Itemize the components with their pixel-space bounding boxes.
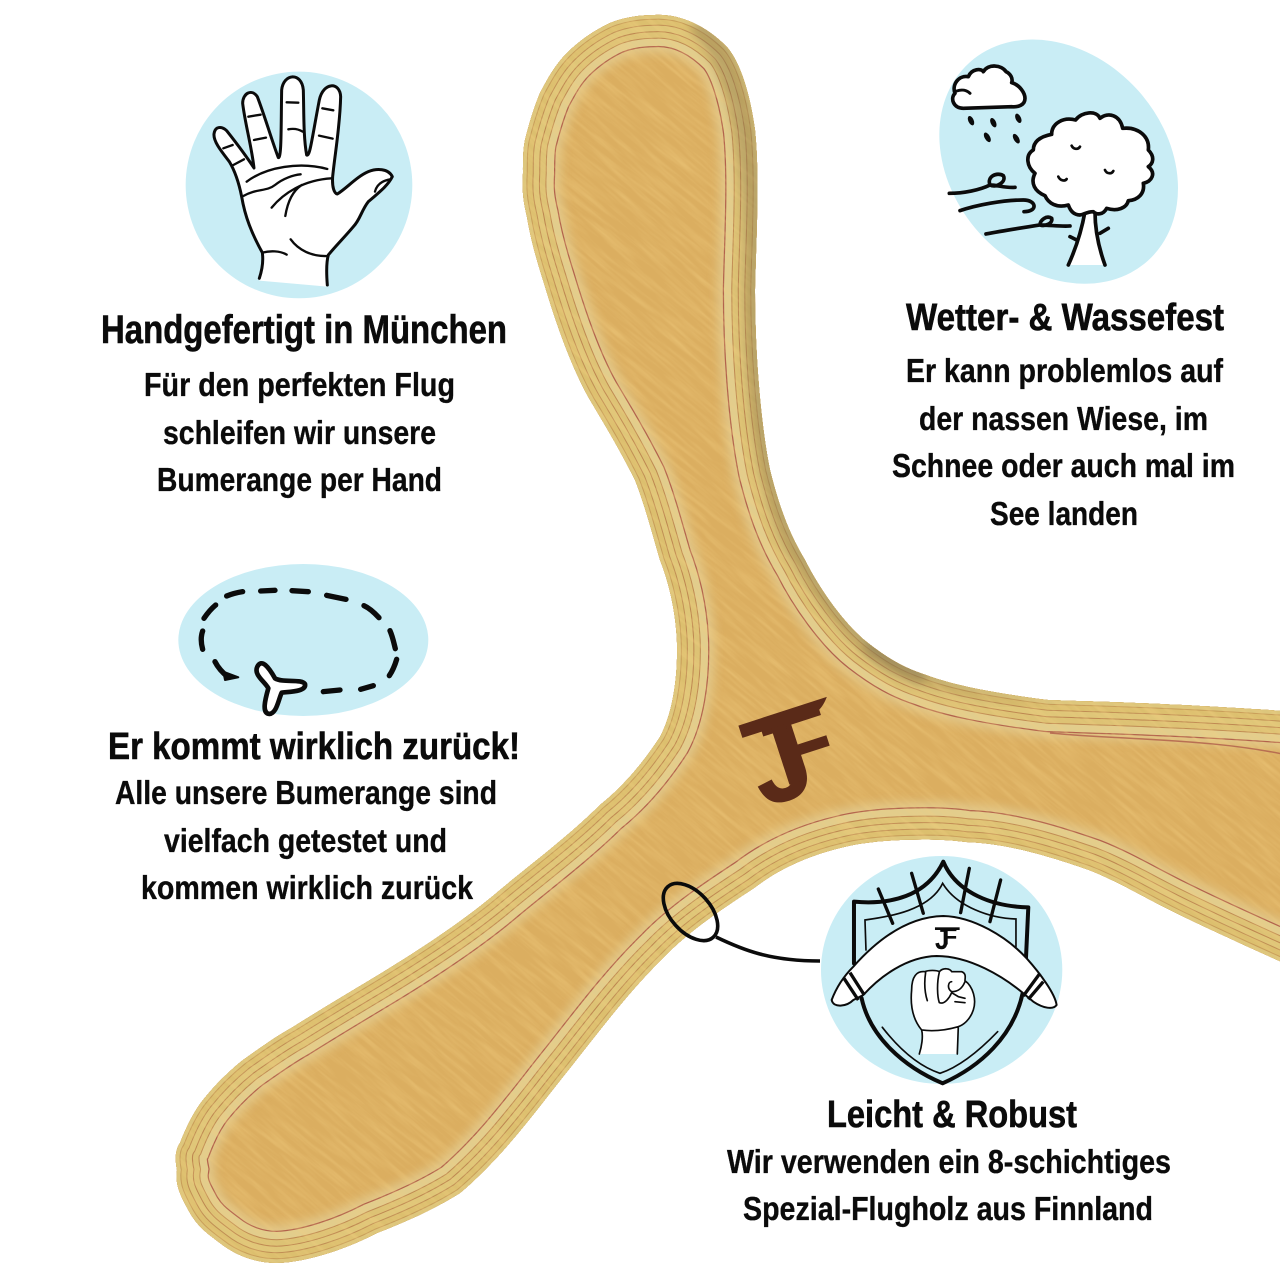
text block: returns: Alle unsere Bumerange sind (115, 774, 497, 811)
icon: small logo (935, 923, 960, 956)
text block: light and robust: Spezial-Flugholz aus Finnland (743, 1190, 1153, 1227)
text block: handmade: Für den perfekten Flug (144, 366, 455, 403)
text block: handmade: schleifen wir unsere (163, 414, 436, 451)
text block: returns (115, 774, 497, 906)
icon: hand (186, 72, 412, 298)
icon: small logo: J (935, 923, 949, 956)
text block: weatherproof: Schnee oder auch mal im (892, 447, 1235, 484)
text block: handmade: Bumerange per Hand (157, 461, 442, 498)
panel: handmade (101, 72, 507, 498)
icon: shield with boomerang and fist (821, 856, 1062, 1084)
text block: returns: kommen wirklich zurück (141, 869, 474, 906)
panel: light and robust (727, 856, 1171, 1227)
text block: weatherproof: Er kann problemlos auf (906, 352, 1224, 389)
heading: light and robust: Leicht & Robust (827, 1094, 1077, 1136)
heading: returns: Er kommt wirklich zurück! (108, 726, 520, 768)
logo burned into the wood: F (755, 683, 848, 807)
icon: weather and tree (890, 0, 1227, 332)
panel: returns (108, 564, 520, 906)
text block: handmade (144, 366, 455, 498)
logo burned into the wood: J (730, 689, 828, 833)
text block: weatherproof (892, 352, 1235, 532)
text block: returns: vielfach getestet und (164, 822, 447, 859)
text block: light and robust: Wir verwenden ein 8-schichtiges (727, 1143, 1171, 1180)
icon: flight path with boomerang (178, 564, 428, 716)
text block: weatherproof: See landen (990, 495, 1138, 532)
text block: weatherproof: der nassen Wiese, im (919, 400, 1208, 437)
callout: edge detail ring and connector (653, 873, 820, 961)
icon: small logo: F (943, 923, 957, 949)
panel: weatherproof (890, 0, 1235, 532)
heading: handmade: Handgefertigt in München (101, 308, 507, 352)
heading: weatherproof: Wetter- & Wassefest (906, 297, 1224, 339)
text block: light and robust (727, 1143, 1171, 1227)
